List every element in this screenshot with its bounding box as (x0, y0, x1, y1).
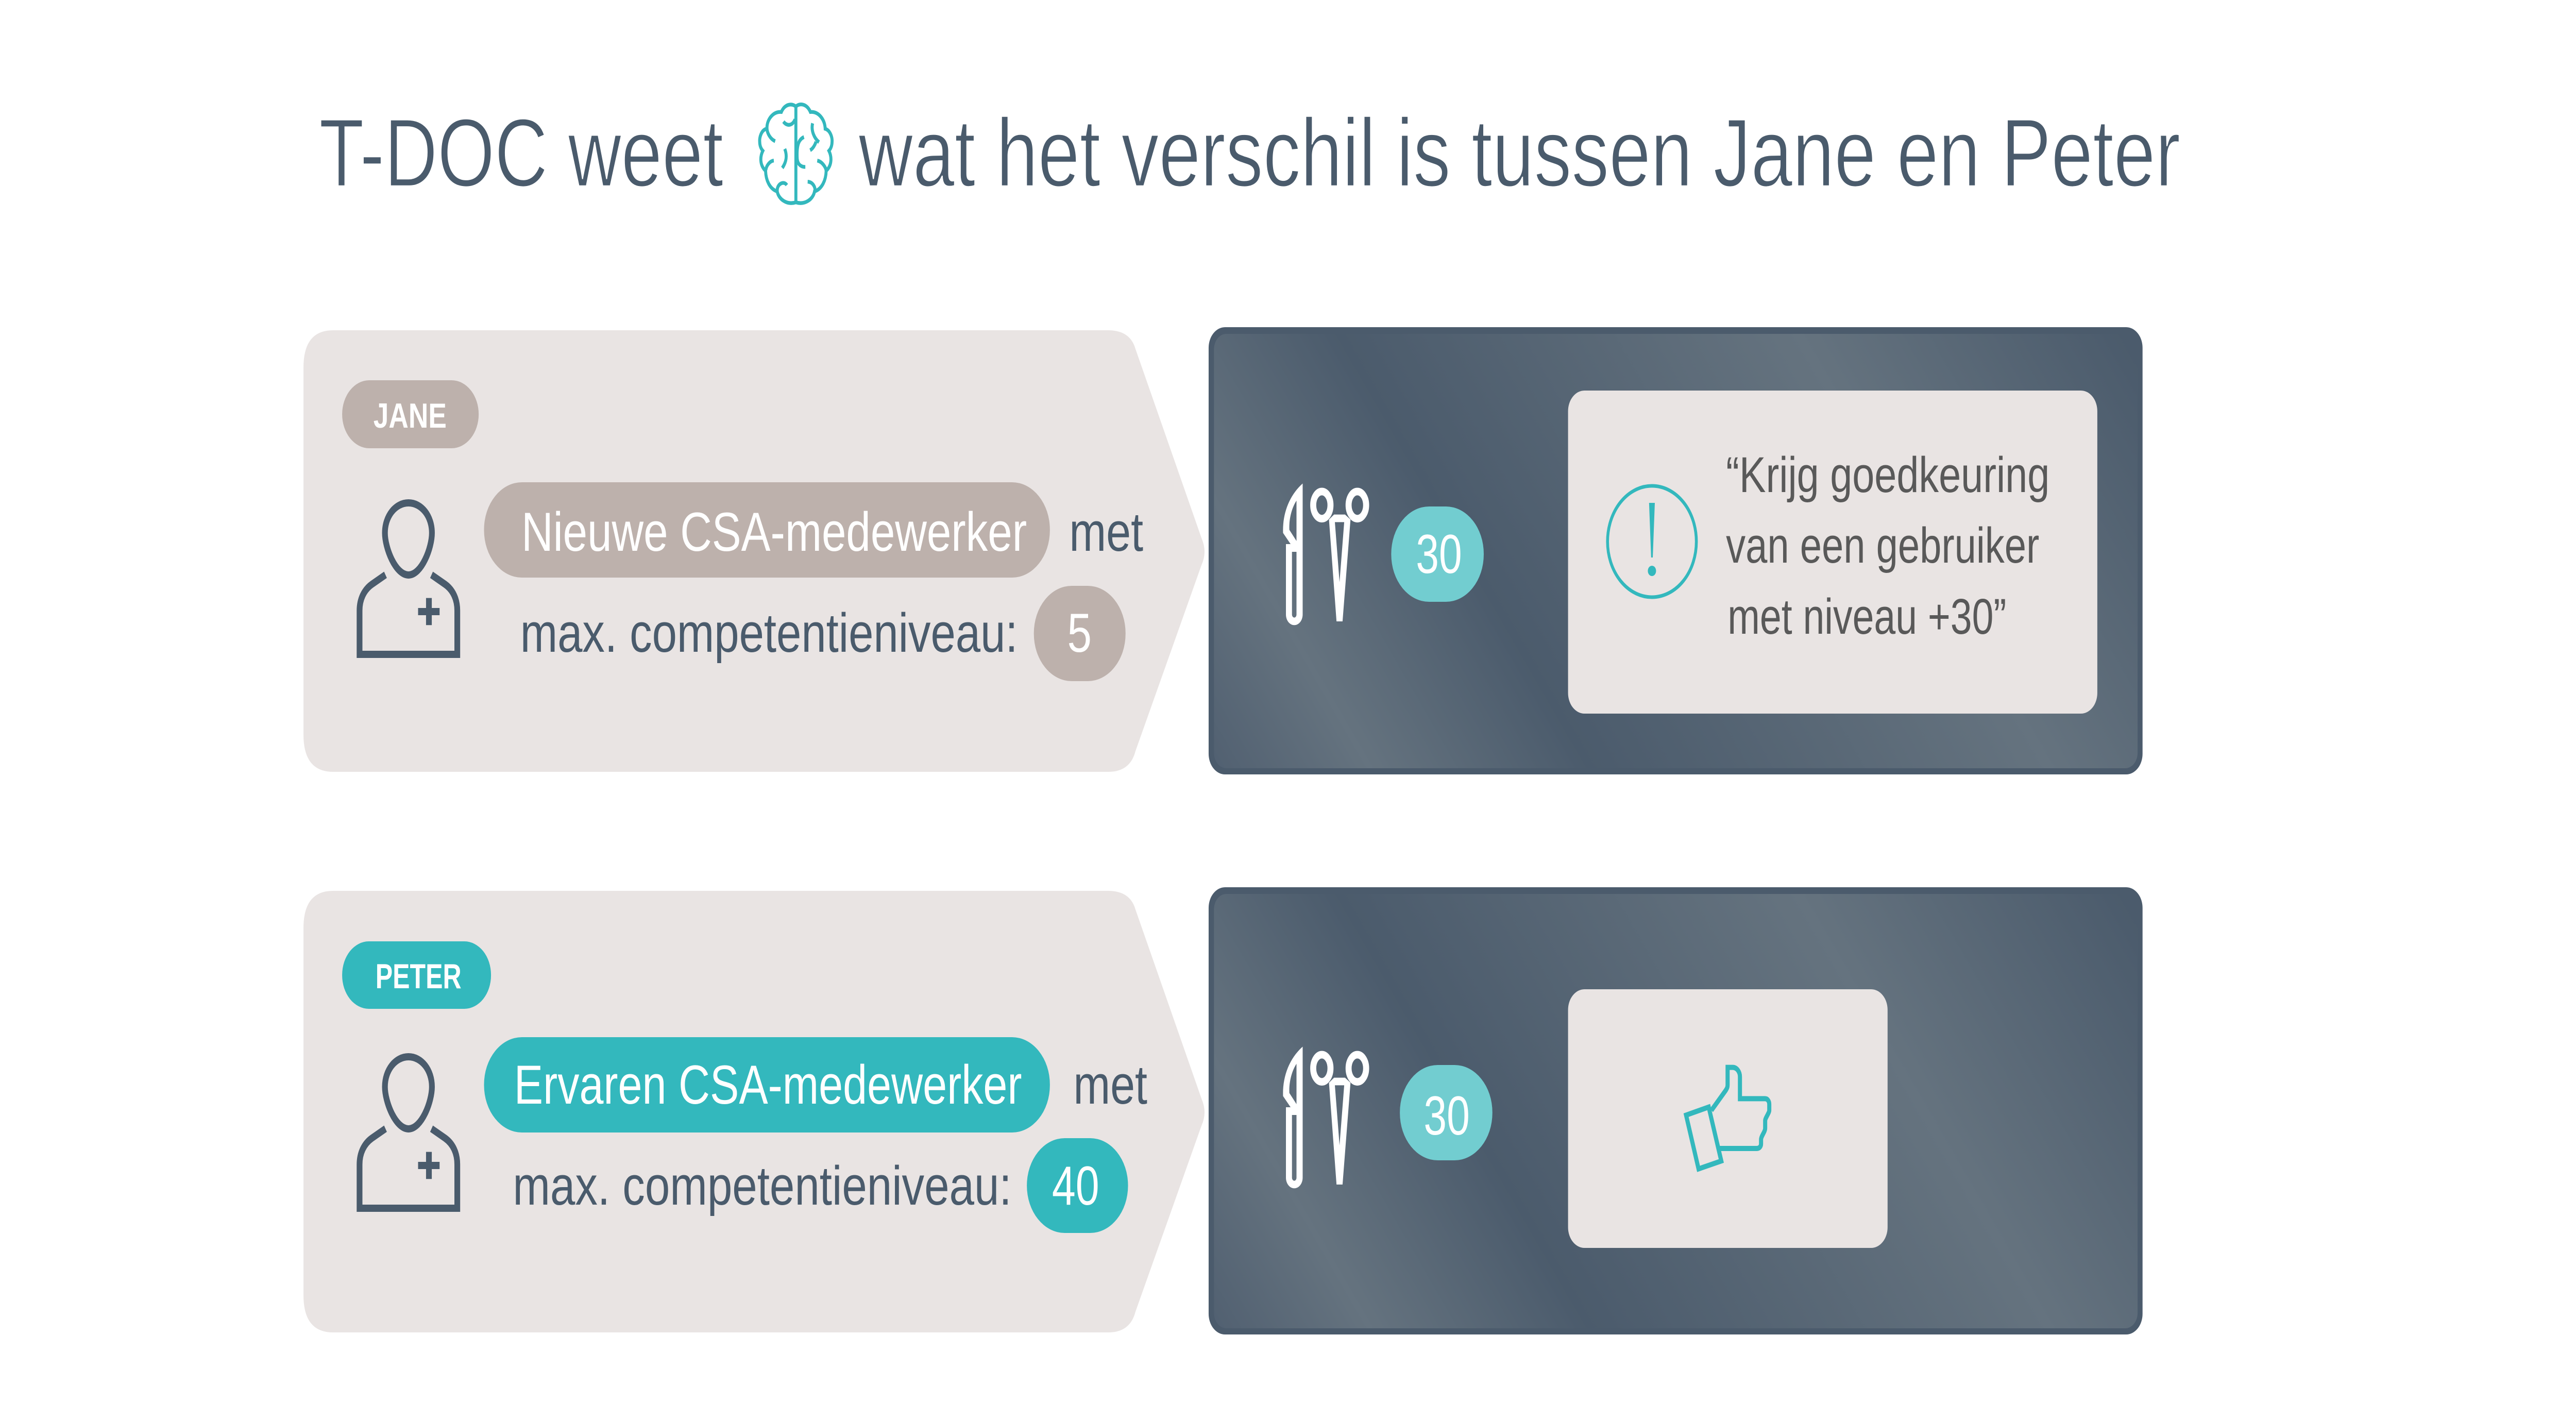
text: max competence level: max. competentieniveau: (520, 602, 1018, 664)
level pill: 30: 30 (1423, 1085, 1470, 1146)
warning card (1568, 391, 2097, 714)
panel: Peter profile (303, 891, 1205, 1332)
panel: Jane procedure (1209, 327, 2143, 774)
name badge: Peter (342, 941, 491, 1009)
icon: scalpel and scissors (1283, 1046, 1366, 1188)
text: max competence level: max. competentieniveau: (513, 1155, 1012, 1216)
dark panel background (1209, 887, 2143, 1334)
name badge: Jane: JANE (374, 396, 447, 435)
level pill: 30 (1391, 506, 1484, 602)
arrow-shaped panel background (303, 891, 1205, 1332)
level pill: 5 (1034, 586, 1126, 681)
dark panel background (1209, 327, 2143, 774)
level pill: 40 (1027, 1138, 1128, 1233)
warning text (1726, 447, 2049, 645)
icon: thumbs up (1686, 1068, 1769, 1169)
panel: Peter procedure (1209, 887, 2143, 1334)
role pill: experienced CSA employee (484, 1037, 1050, 1132)
icon: brain (759, 105, 832, 203)
icon: scalpel and scissors (1283, 483, 1366, 625)
level pill: 40: 40 (1052, 1155, 1099, 1216)
text: met: met (1069, 501, 1143, 563)
panel: Jane profile (303, 330, 1205, 772)
text: met: met (1073, 1054, 1147, 1115)
title: T-DOC weet (319, 99, 723, 207)
level pill: 5: 5 (1067, 602, 1092, 664)
arrow-shaped panel background (303, 330, 1205, 772)
approval card (1568, 989, 1888, 1248)
icon: medical staff person (360, 503, 457, 654)
icon: medical staff person (360, 1057, 457, 1208)
icon: exclamation mark (1607, 486, 1697, 597)
title: wat het verschil is tussen Jane en Peter (858, 99, 2180, 207)
title (319, 99, 2180, 207)
name badge: Jane (342, 380, 479, 448)
role pill: new CSA employee (484, 482, 1050, 578)
role pill: new CSA employee: Nieuwe CSA-medewerker (521, 501, 1027, 563)
level pill: 30 (1400, 1065, 1493, 1160)
level pill: 30: 30 (1416, 523, 1462, 585)
warning text: met niveau +30” (1727, 589, 2006, 645)
warning text: van een gebruiker (1726, 518, 2039, 573)
name badge: Peter: PETER (376, 957, 462, 996)
role pill: experienced CSA employee: Ervaren CSA-medewerker (514, 1054, 1022, 1115)
warning text: “Krijg goedkeuring (1726, 447, 2049, 503)
